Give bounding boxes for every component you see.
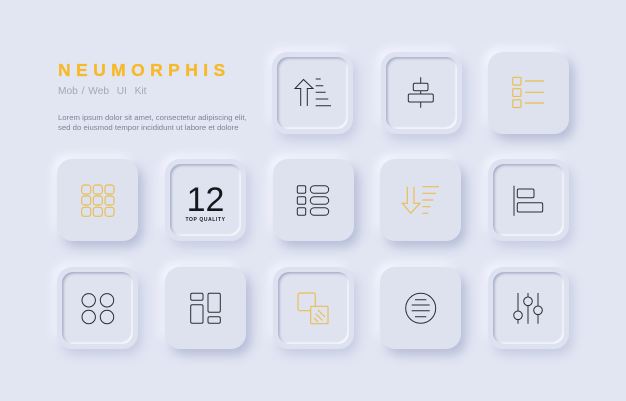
tile: dashboard layout bbox=[165, 267, 246, 349]
tile: 12 top quality bbox=[165, 159, 246, 241]
description text: sed do eiusmod tempor incididunt ut labore et dolore bbox=[58, 122, 239, 132]
title: NEUMORPHIS bbox=[58, 60, 231, 80]
tile: list with pills bbox=[273, 159, 354, 241]
subtitle: Mob / Web UI Kit bbox=[58, 86, 146, 97]
tile: yellow overlapping squares bbox=[273, 267, 354, 349]
tile: sort ascending arrow bbox=[272, 52, 353, 134]
tile: align center bbox=[381, 52, 462, 134]
tile: yellow grid bbox=[57, 159, 138, 241]
tile: 12 top quality: 12 bbox=[187, 181, 224, 219]
tile: 12 top quality: TOP QUALITY bbox=[185, 216, 226, 222]
tile: four circles bbox=[57, 267, 138, 349]
description text: Lorem ipsum dolor sit amet, consectetur adipiscing elit, bbox=[58, 113, 247, 122]
tile: align left bbox=[488, 159, 569, 241]
tile: yellow checklist bbox=[488, 52, 569, 134]
tile: circle with lines bbox=[380, 267, 461, 349]
tile: yellow sort descending arrow bbox=[380, 159, 461, 241]
description text bbox=[58, 113, 247, 132]
tile: sliders bbox=[488, 267, 569, 349]
